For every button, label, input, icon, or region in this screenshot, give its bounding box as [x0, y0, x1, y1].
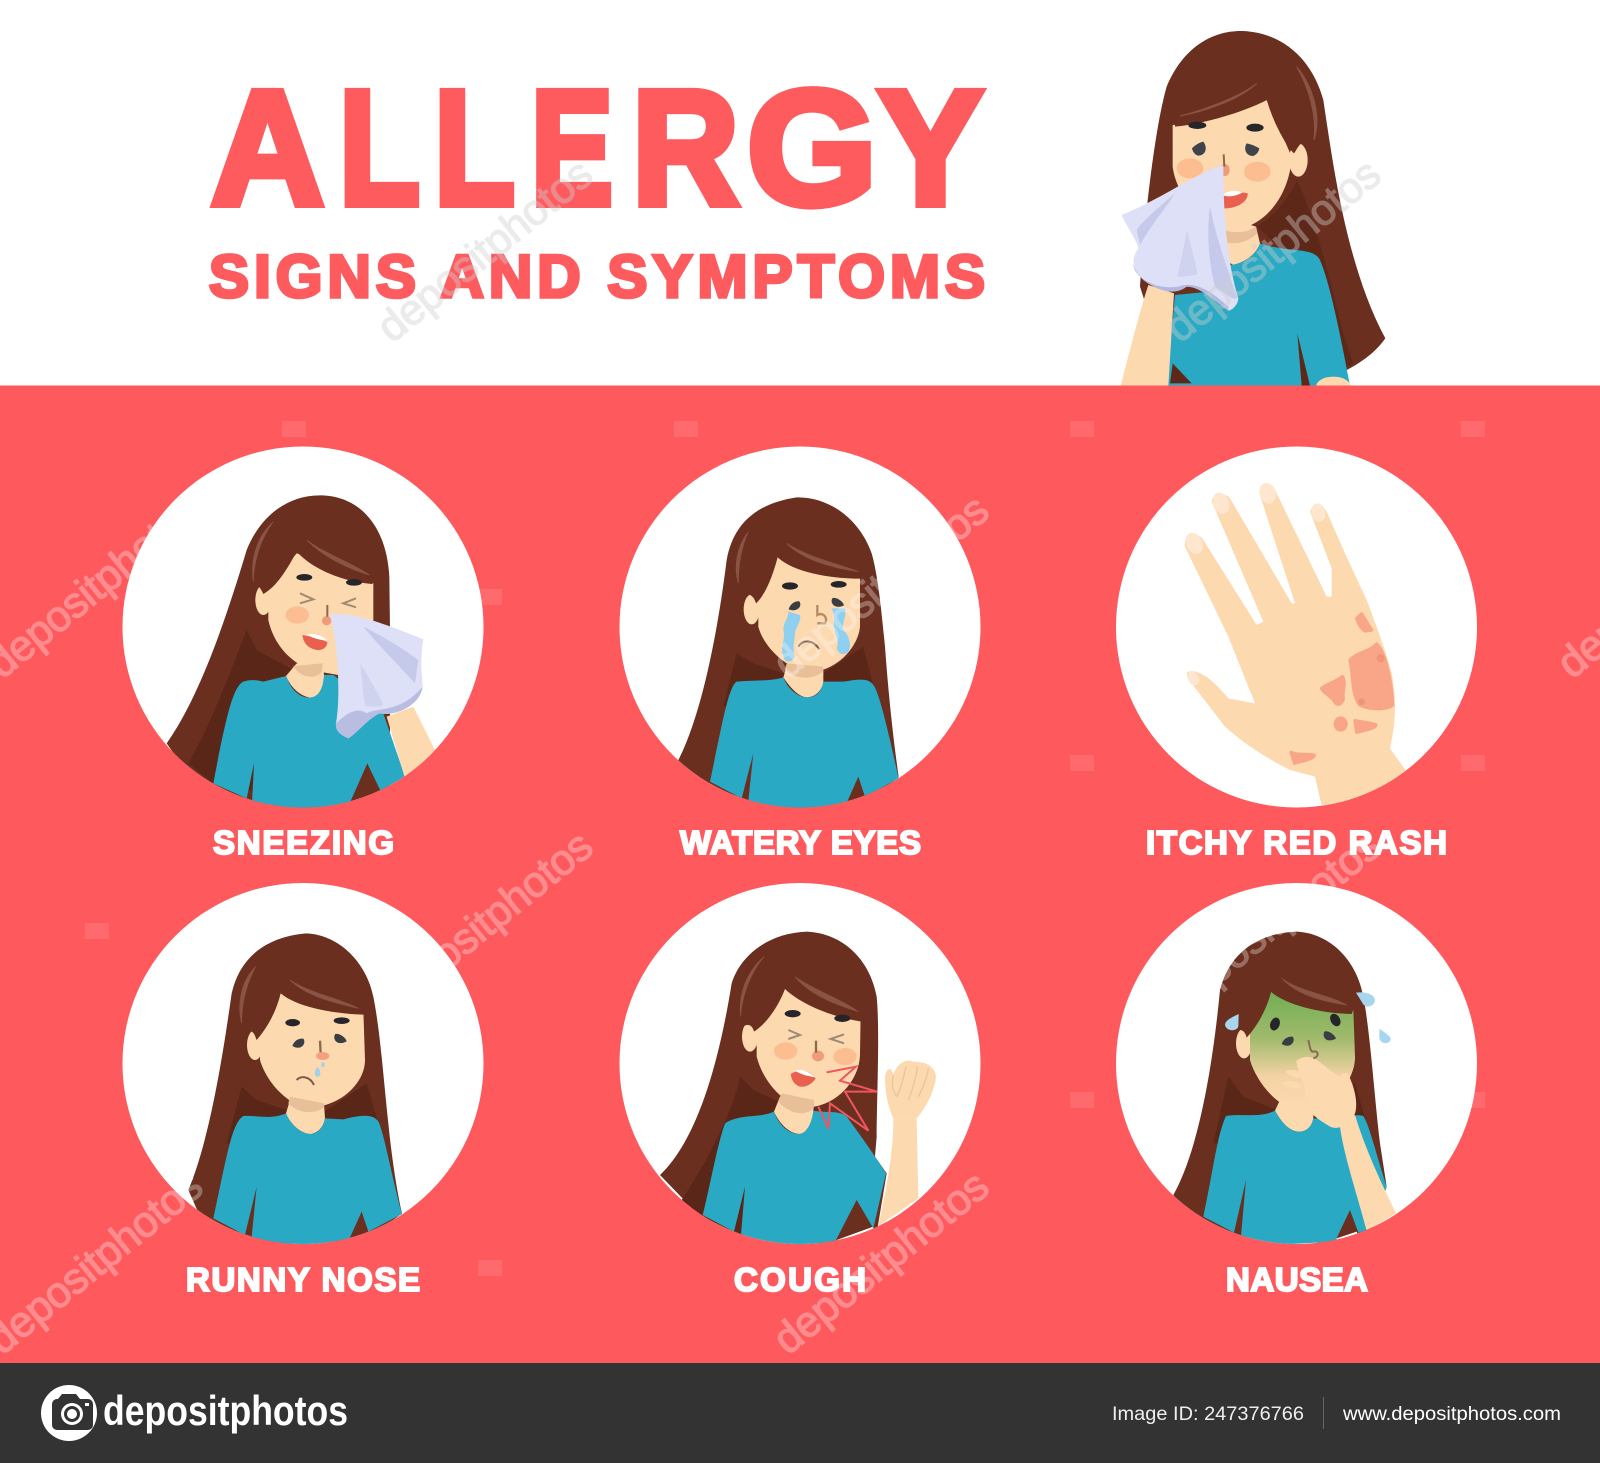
label: cough: COUGH: [734, 1261, 866, 1298]
panel: watery eyes: [620, 446, 980, 861]
title: ALLERGY: L: [434, 56, 515, 239]
panel: cough: [620, 883, 980, 1298]
illustration: sneezing woman: [167, 495, 435, 810]
watermarks: depositphotos: [368, 822, 602, 1024]
title: ALLERGY: E: [531, 56, 613, 239]
panel: runny nose: [122, 883, 484, 1298]
watermarks: depositphotos: [764, 1162, 998, 1364]
title: ALLERGY: L: [339, 56, 420, 239]
circle: runny nose: [122, 883, 484, 1244]
label: watery eyes: WATERY EYES: [680, 824, 921, 861]
label: sneezing: SNEEZING: [213, 824, 394, 861]
label: nausea: NAUSEA: [1226, 1261, 1368, 1298]
watermarks: depositphotos: [368, 150, 602, 352]
circle: nausea: [1116, 883, 1477, 1244]
circle: watery eyes: [620, 446, 980, 808]
illustration: coughing woman: [660, 932, 936, 1247]
website url: www.depositphotos.com: [1342, 1403, 1561, 1425]
watermark camera stamps on red: [85, 421, 1485, 1276]
logo wordmark: depositphotos: [103, 1387, 348, 1434]
illustration: woman with runny nose: [188, 933, 402, 1247]
watermarks: depositphotos: [1156, 822, 1390, 1024]
illustration: crying woman: [677, 497, 899, 810]
title: ALLERGY: A: [211, 56, 324, 239]
icon: camera logo: [41, 1385, 97, 1441]
circle: cough: [620, 883, 980, 1244]
footer logo: [41, 1385, 348, 1441]
footer bar: [0, 1363, 1600, 1463]
circle: rash: [1116, 446, 1477, 808]
title: ALLERGY: Y: [878, 56, 983, 239]
circle: sneezing: [122, 446, 484, 808]
panel: itchy red rash: [1116, 446, 1477, 861]
title: ALLERGY: R: [632, 56, 739, 239]
illustration: woman with tissue: [1121, 31, 1385, 397]
panel: nausea: [1116, 883, 1477, 1298]
title: ALLERGY: G: [747, 56, 877, 239]
red panel background: [0, 386, 1600, 1364]
watermarks: depositphotos: [1156, 150, 1390, 352]
subtitle: signs and symptoms: SIGNS AND SYMPTOMS: [209, 243, 985, 310]
illustration: hand with rash: [1182, 481, 1410, 810]
panel: sneezing: [122, 446, 484, 861]
image id: Image ID: 247376766: [1112, 1403, 1304, 1425]
label: runny nose: RUNNY NOSE: [186, 1261, 420, 1298]
label: itchy red rash: ITCHY RED RASH: [1146, 824, 1447, 861]
illustration: nauseous woman: [1173, 932, 1396, 1247]
watermarks: depositphotos: [764, 486, 998, 688]
